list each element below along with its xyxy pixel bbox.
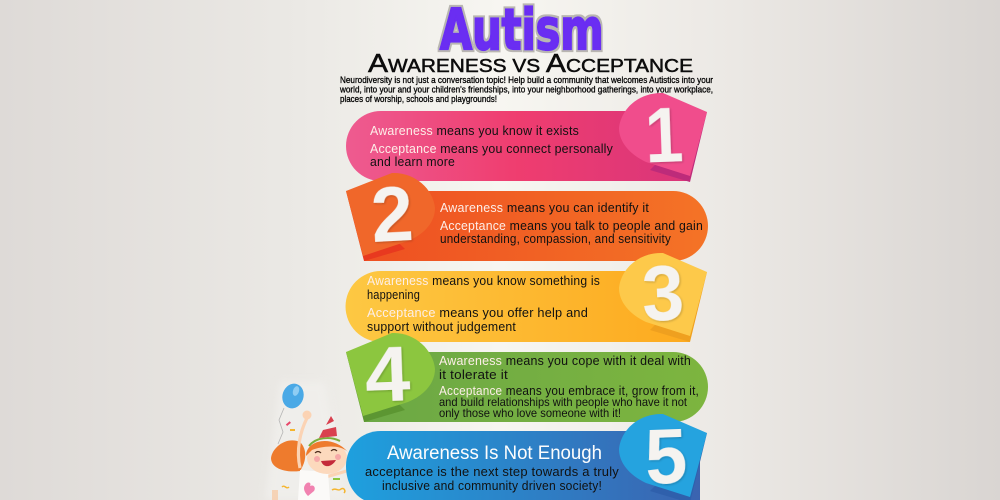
intro text: Neurodiversity is not just a conversation topic! Help build a community that welcomes Autistics into your [340, 75, 713, 86]
faded backdrop [265, 382, 345, 500]
badge 2: 2 [369, 169, 415, 259]
text: point 4: it tolerate it [439, 368, 508, 382]
party hat [319, 411, 337, 438]
text: conclusion [365, 443, 620, 493]
hand [302, 410, 312, 420]
text: point 2 [440, 201, 703, 246]
intro text [339, 75, 713, 105]
text: point 1: and learn more [370, 155, 455, 169]
heading: AWARENESS VS ACCEPTANCE [368, 48, 693, 78]
panel: point 5 [346, 411, 707, 500]
text: conclusion: acceptance is the next step towards a truly [365, 465, 620, 479]
intro text: places of worship, schools and playgrounds! [340, 94, 497, 105]
text: point 1: Awareness means you know it exists [370, 124, 579, 138]
text: point 3: happening [367, 288, 420, 302]
text: point 2: understanding, compassion, and sensitivity [440, 232, 672, 246]
text: point 4 [439, 354, 699, 420]
face [307, 442, 347, 474]
badge 1: 1 [643, 90, 685, 179]
text: point 2: Acceptance means you talk to people and gain [440, 219, 703, 233]
smile [321, 460, 336, 466]
badge 5: 5 [644, 411, 689, 500]
intro text: world, into your and your children's friendships, into your neighborhood gatherings, into your workplace, [339, 84, 713, 96]
badge 3: 3 [640, 248, 685, 338]
text: point 3 [367, 274, 600, 334]
panel: point 1 [346, 90, 707, 182]
text: conclusion: Awareness Is Not Enough [387, 443, 602, 464]
badge 5 [619, 411, 707, 500]
heart [304, 482, 315, 496]
hair back [271, 440, 305, 471]
dress [298, 470, 330, 500]
confetti [272, 421, 345, 500]
text: point 4: and build relationships with people who have it not [439, 395, 688, 409]
text: point 1: Acceptance means you connect personally [370, 142, 614, 156]
badge 4: 4 [363, 329, 412, 419]
badge 1 [619, 90, 707, 182]
balloon [278, 381, 307, 444]
text: point 4: Acceptance means you embrace it, grow from it, [439, 384, 699, 398]
text: point 1 [370, 124, 614, 169]
badge 2 [346, 169, 435, 261]
panel: point 4 [346, 329, 708, 422]
arms [298, 418, 307, 468]
panel: point 2 [346, 169, 708, 261]
badge 4 [346, 329, 435, 422]
text: conclusion: inclusive and community driven society! [382, 479, 602, 493]
text: point 3: Acceptance means you offer help and [367, 306, 588, 320]
text: point 4: Awareness means you cope with it deal with [439, 354, 691, 368]
badge 3 [619, 248, 707, 342]
text: point 2: Awareness means you can identify it [440, 201, 649, 215]
text: point 3: support without judgement [367, 320, 516, 334]
fringe [306, 441, 348, 456]
illustration: girl with balloon [265, 381, 350, 500]
panel: point 3 [346, 248, 707, 342]
text: point 3: Awareness means you know something is [367, 274, 600, 288]
text: point 4: only those who love someone with it! [439, 406, 621, 420]
